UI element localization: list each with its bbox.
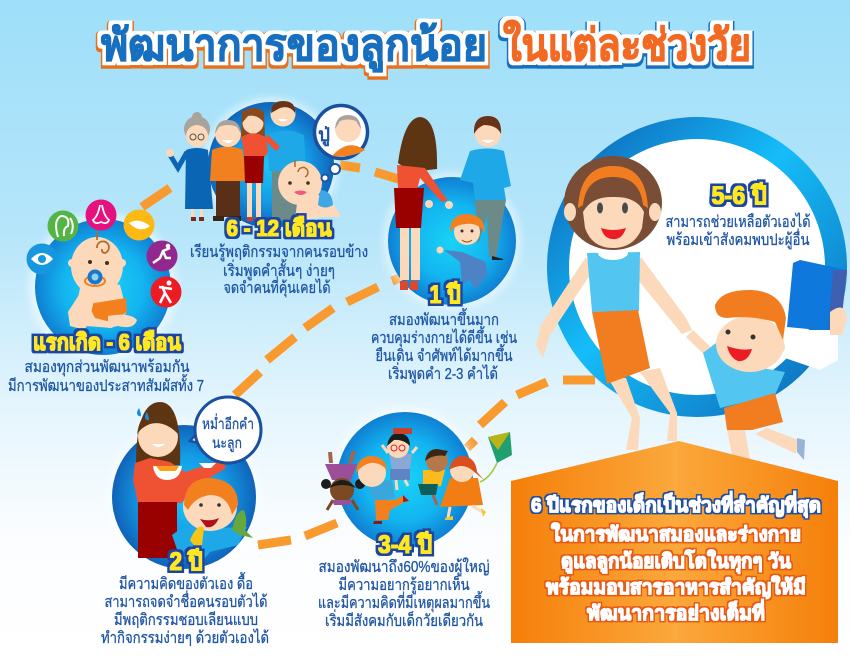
text block: 5 to 6 years: พร้อมเข้าสังคมพบปะผู้อื่น [666, 228, 810, 250]
panel: 6 to 12 months [166, 97, 368, 298]
boy with glasses [382, 428, 417, 490]
text block: 3 to 4 years: มีความอยากรู้อยากเห็น [338, 574, 470, 595]
text block: 2 years [101, 572, 269, 647]
panel: 5 to 6 years [536, 117, 847, 460]
boy in blue shirt [356, 456, 409, 524]
text block: 1 year [371, 308, 517, 384]
key message headline: 6 ปีแรกของเด็กเป็นช่วงที่สำคัญที่สุด [531, 490, 821, 518]
icon: grandfather [210, 120, 246, 221]
key message text: พร้อมมอบสารอาหารสำคัญให้มี [546, 575, 806, 599]
icon: active child [150, 276, 182, 308]
key message text [546, 522, 806, 625]
text block: 1 year: ควบคุมร่างกายได้ดีขึ้น เช่น [371, 326, 517, 348]
icon: toddler walking [436, 214, 487, 290]
icon: thought bubble grandfather [314, 106, 368, 182]
panel: 2 years [101, 397, 269, 647]
text block: 3 to 4 years: เริ่มมีสังคมกับเด็กวัยเดียวกัน [325, 609, 483, 630]
panel: birth to 6 months [8, 200, 204, 395]
title [101, 19, 751, 72]
text block: 2 years: ทำกิจกรรมง่ายๆ ด้วยตัวเองได้ [101, 628, 269, 647]
text block: 3 to 4 years [318, 557, 490, 630]
icon: eye [26, 244, 58, 274]
text block: 1 year: ยืนเดิน จำศัพท์ได้มากขึ้น [376, 344, 513, 365]
text block: 5 to 6 years [666, 212, 810, 250]
icon: mother holding hand [536, 156, 692, 450]
panel: 1 year [371, 116, 521, 384]
icon: playing children [321, 428, 512, 524]
text block: birth to 6 months: สมองทุกส่วนพัฒนาพร้อมกัน [24, 358, 190, 377]
icon: toddler with toys [172, 478, 253, 558]
key message text: ดูแลลูกน้อยเติบโตในทุกๆ วัน [561, 549, 791, 575]
panel: 3 to 4 years [318, 407, 512, 630]
heading: 6 to 12 months: 6 - 12 เดือน [226, 215, 332, 241]
key message text: พัฒนาการอย่างเต็มที่ [587, 598, 765, 625]
girl in orange dress [440, 456, 486, 520]
heading: 1 year: 1 ปี [430, 281, 460, 309]
text block: 1 year: สมองพัฒนาขึ้นมาก [389, 308, 499, 329]
icon: speech bubble: หม่ำอีกคำ [202, 413, 254, 433]
icon: mother [241, 108, 278, 221]
icon: runner [146, 240, 178, 272]
heading: birth to 6 months: แรกเกิด - 6 เดือน [33, 329, 181, 355]
heading: 3 to 4 years: 3-4 ปี [378, 531, 432, 559]
kite [480, 432, 512, 482]
title part two: ในแต่ละช่วงวัย [503, 19, 751, 70]
icon: mother feeding [133, 402, 226, 558]
text block: birth to 6 months [8, 358, 204, 395]
title part one: พัฒนาการของลูกน้อย [101, 21, 487, 72]
text block: 3 to 4 years: สมองพัฒนาถึง60%ของผู้ใหญ่ [318, 557, 490, 577]
icon: baby with pacifier [68, 231, 137, 330]
heading: 2 years: 2 ปี [170, 548, 202, 576]
icon: nose [86, 200, 116, 230]
icon: lips [124, 210, 154, 240]
dashed path connecting stages [142, 165, 595, 545]
text block: 2 years: สามารถจดจำชื่อคนรอบตัวได้ [104, 590, 268, 611]
icon: speech bubble [190, 397, 261, 463]
boy in yellow shirt [418, 449, 448, 505]
text block: 2 years: มีความคิดของตัวเอง ดื้อ [119, 572, 253, 593]
icon: crawling baby [278, 160, 341, 220]
text block: 6 to 12 months: เรียนรู้พฤติกรรมจากคนรอบข้าง [190, 243, 368, 262]
icon: father clapping [460, 116, 511, 260]
text block: 2 years: มีพฤติกรรมชอบเลียนแบบ [114, 611, 258, 629]
icon: ear [48, 210, 78, 242]
icon: father [267, 101, 306, 221]
upside-down girl [321, 451, 365, 510]
icon: thought bubble grandfather: ปู่ [318, 125, 330, 147]
icon: mother from behind [394, 117, 453, 290]
icon: grandmother [166, 112, 213, 221]
text block: 6 to 12 months [190, 243, 368, 298]
heading: 5 to 6 years: 5-6 ปี [712, 182, 766, 210]
key message text: ในการพัฒนาสมองและร่างกาย [551, 522, 801, 546]
text block: 6 to 12 months: จดจำคนที่คุ้นเคยได้ [224, 276, 330, 298]
text block: 6 to 12 months: เริ่มพูดคำสั้นๆ ง่ายๆ [223, 259, 335, 281]
icon: speech bubble: นะลูก [212, 435, 242, 452]
icon: boy with product box [686, 260, 847, 460]
text block: 5 to 6 years: สามารถช่วยเหลือตัวเองได้ [666, 212, 810, 231]
text block: 1 year: เริ่มพูดคำ 2-3 คำได้ [388, 362, 498, 384]
text block: birth to 6 months: มีการพัฒนาของประสาทสัมผัสทั้ง 7 [8, 374, 204, 395]
panel: key message [511, 441, 838, 643]
text block: 3 to 4 years: และมีความคิดที่มีเหตุผลมากขึ้น [318, 591, 490, 613]
